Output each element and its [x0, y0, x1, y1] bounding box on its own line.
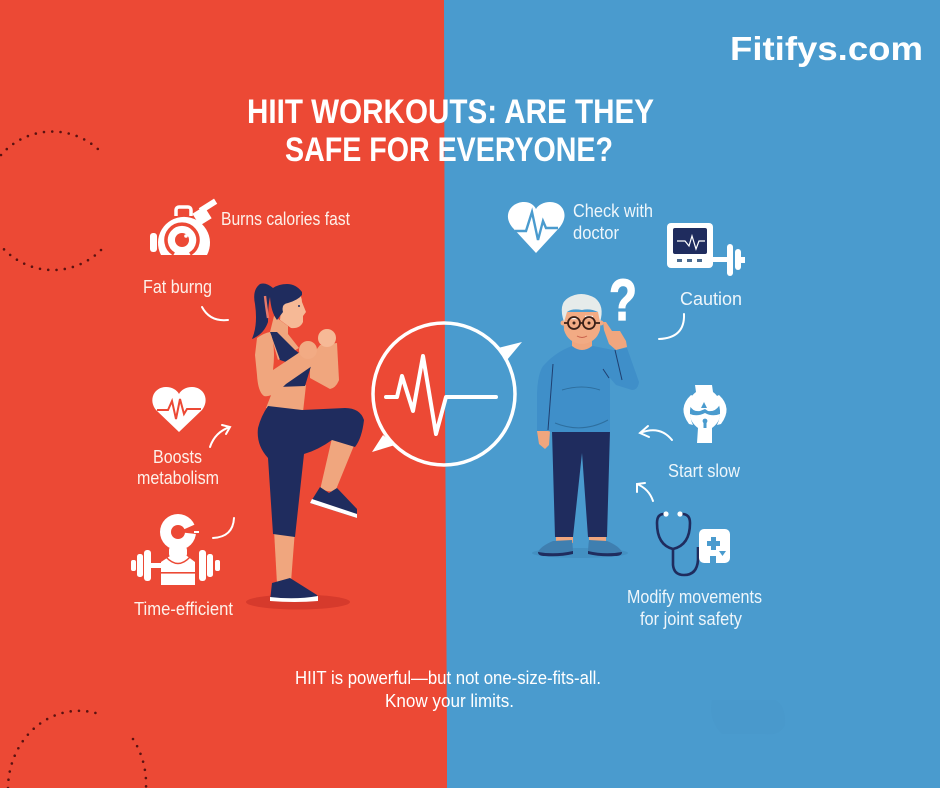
arrow: caution curve: [659, 314, 684, 339]
icon: heart with pulse: [508, 202, 565, 253]
front arm: [255, 332, 313, 396]
title: [247, 93, 654, 169]
label: start slow: Start slow: [668, 460, 741, 481]
label: modify movements: [627, 586, 762, 629]
left hand: [537, 431, 550, 449]
leggings: [258, 406, 364, 537]
face: [280, 291, 306, 328]
figure: older man: [532, 294, 639, 558]
label: modify movements: Modify movements: [627, 586, 762, 607]
bra: [270, 332, 312, 387]
hair and ponytail: [252, 284, 302, 339]
label: check with doctor: doctor: [573, 222, 619, 243]
decorative dotted circle bottom left: [8, 711, 146, 788]
hair: [562, 294, 602, 322]
icon: stethoscope and medical kit: [657, 511, 730, 575]
label: boosts metabolism: [137, 447, 219, 488]
brand name: Fitifys.com: [730, 30, 923, 67]
standing lower leg: [274, 530, 295, 584]
shoes: [538, 540, 573, 556]
label: boosts metabolism: metabolism: [137, 468, 219, 488]
icon: question mark: ?: [609, 268, 637, 333]
trousers: [552, 431, 610, 537]
label: caution: Caution: [680, 288, 742, 309]
label: check with doctor: [573, 200, 653, 243]
label: time efficient: Time-efficient: [134, 599, 233, 619]
standing foot: [270, 578, 318, 601]
raised shin: [320, 438, 355, 492]
icon: stopwatch: [150, 199, 217, 255]
title: HIIT WORKOUTS: ARE THEY: [247, 93, 654, 131]
icon: dumbbell with timer: [131, 514, 220, 585]
head: [563, 312, 601, 344]
closing message: [295, 668, 601, 711]
icon: knee joint: [683, 385, 727, 443]
decorative dotted circle top left: [1, 132, 102, 270]
glasses: [564, 317, 600, 329]
arrow: fat burning curve: [202, 307, 228, 320]
ankles: [556, 534, 573, 543]
sweater: [537, 346, 639, 432]
arrow: modify movements: [637, 483, 653, 501]
raised foot: [310, 487, 357, 518]
title: SAFE FOR EVERYONE?: [285, 131, 613, 169]
closing message: Know your limits.: [385, 691, 514, 711]
neck: [572, 338, 592, 350]
label: check with doctor: Check with: [573, 200, 653, 221]
closing message: HIIT is powerful—but not one-size-fits-all.: [295, 668, 601, 688]
arrow: start slow: [640, 426, 672, 440]
arrow: time efficient curve: [213, 518, 234, 538]
label: burns calories fast: Burns calories fast: [221, 209, 350, 229]
waist: [266, 385, 306, 412]
chart: central heartbeat circle: [372, 323, 522, 465]
arrow: boosts metabolism: [210, 425, 230, 447]
neck: [270, 316, 299, 360]
label: modify movements: for joint safety: [640, 608, 743, 629]
label: boosts metabolism: Boosts: [153, 447, 202, 467]
icon: heart monitor with dumbbell: [667, 223, 745, 276]
back arm: [310, 343, 339, 389]
icon: heart with pulse: [152, 387, 206, 432]
label: fat burning: Fat burng: [143, 277, 212, 297]
figure: woman in workout pose: [246, 284, 364, 610]
raised hand: [603, 322, 627, 350]
